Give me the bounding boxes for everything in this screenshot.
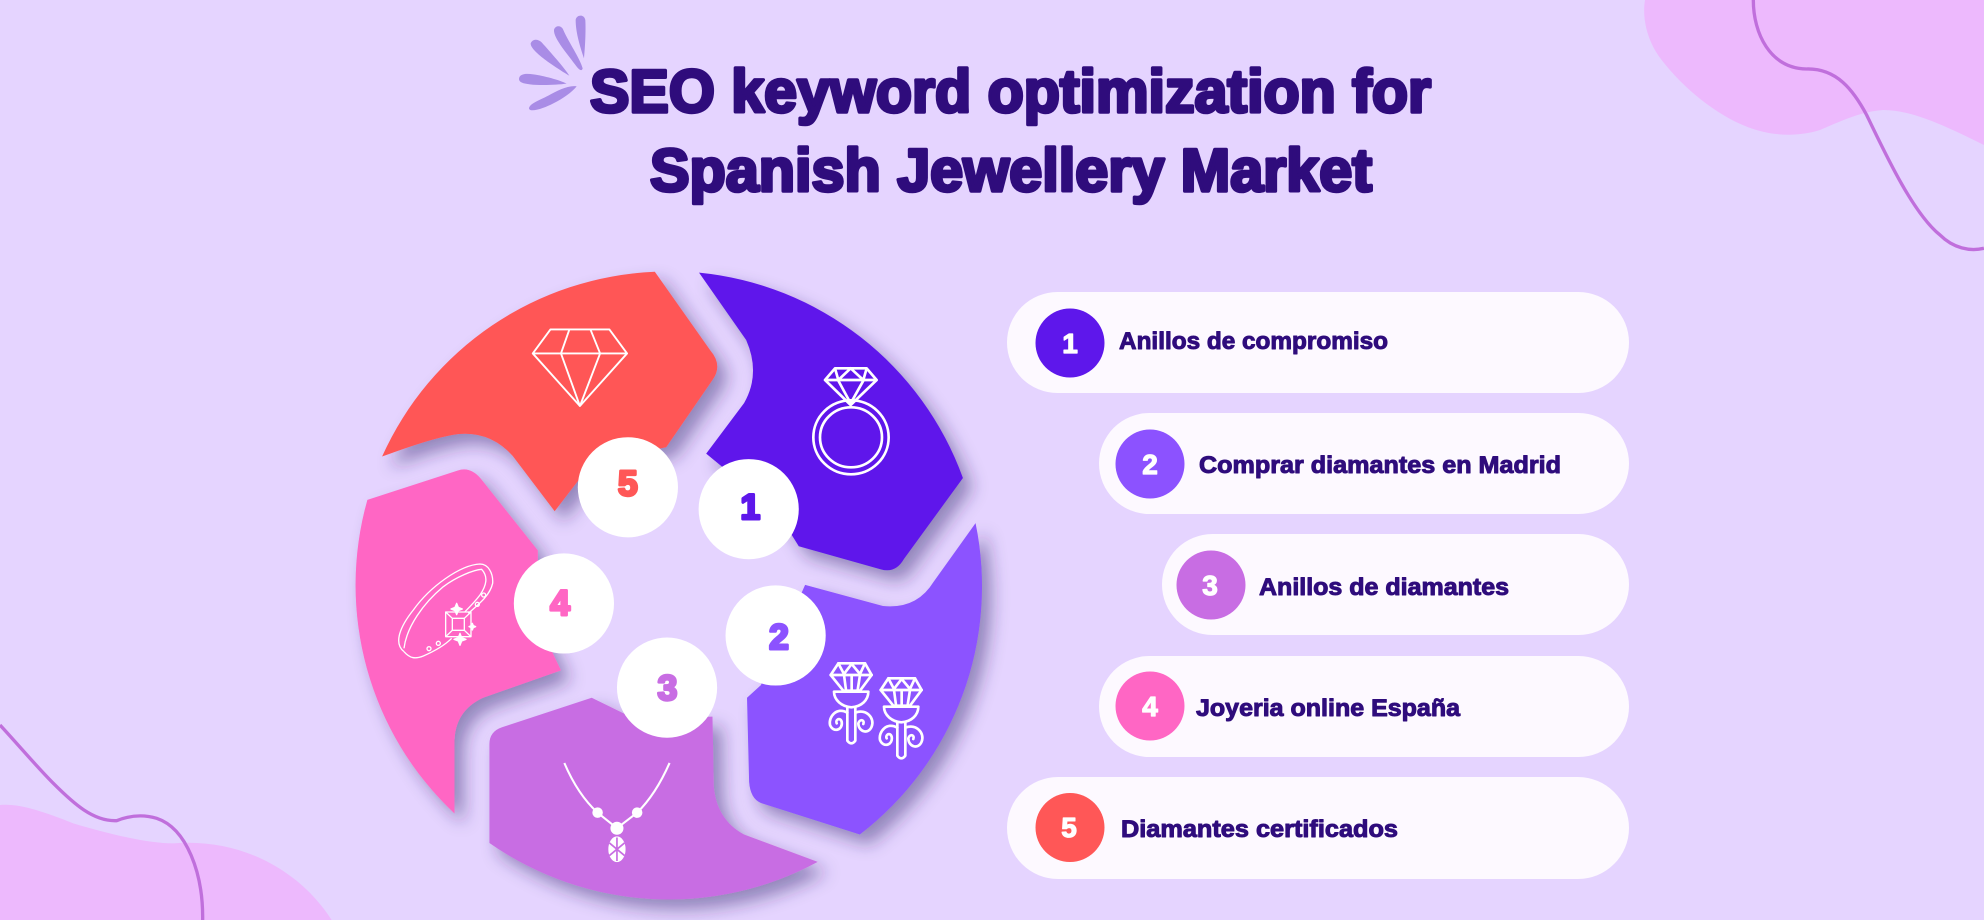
earring right — [880, 678, 922, 758]
list item 4 — [1099, 656, 1629, 757]
list item 4: Joyeria online España — [1196, 695, 1461, 722]
icon: diamond — [533, 329, 627, 406]
icon: ring — [813, 368, 889, 474]
title — [590, 58, 1431, 204]
segment 2 — [747, 523, 982, 835]
number badge 3 — [617, 638, 717, 738]
segment 1 — [699, 273, 963, 570]
number badge 1 — [699, 459, 799, 559]
chart: circular five-segment wheel — [356, 272, 982, 899]
list item 3: 3 — [1202, 570, 1218, 601]
number badge 3: 3 — [658, 669, 677, 708]
list item 3 — [1162, 534, 1629, 635]
number badge 1: 1 — [741, 488, 760, 527]
list item 1: 1 — [1062, 328, 1078, 359]
list item 5 — [1007, 777, 1629, 879]
number badge 2 — [726, 585, 826, 686]
icon: title burst — [519, 16, 586, 110]
list item 5: Diamantes certificados — [1121, 816, 1398, 843]
list item 2: 2 — [1142, 449, 1158, 480]
earring left — [830, 663, 872, 743]
number badge 5 — [578, 437, 678, 537]
segment 5 — [382, 272, 717, 511]
number badge 2: 2 — [769, 618, 789, 657]
segment 3 — [489, 698, 818, 899]
number badge 5: 5 — [618, 465, 638, 504]
decoration: bottom left blob and line — [0, 725, 332, 920]
title: SEO keyword optimization for — [590, 58, 1431, 125]
list item 1 — [1007, 292, 1629, 393]
icon: earrings — [830, 663, 922, 758]
number badge 4 — [514, 553, 614, 654]
list item 5: 5 — [1061, 812, 1077, 843]
title: Spanish Jewellery Market — [650, 137, 1372, 204]
number badge 4: 4 — [550, 584, 570, 623]
list item 4: 4 — [1142, 691, 1158, 722]
icon: bracelet — [399, 564, 493, 658]
list item 1: Anillos de compromiso — [1119, 328, 1388, 355]
list item 2 — [1099, 413, 1629, 514]
list item 2: Comprar diamantes en Madrid — [1199, 452, 1561, 479]
decoration: top right blob and line — [1644, 0, 1984, 250]
list item 3: Anillos de diamantes — [1259, 574, 1509, 601]
icon: necklace — [564, 763, 670, 861]
segment 4 — [356, 469, 561, 813]
